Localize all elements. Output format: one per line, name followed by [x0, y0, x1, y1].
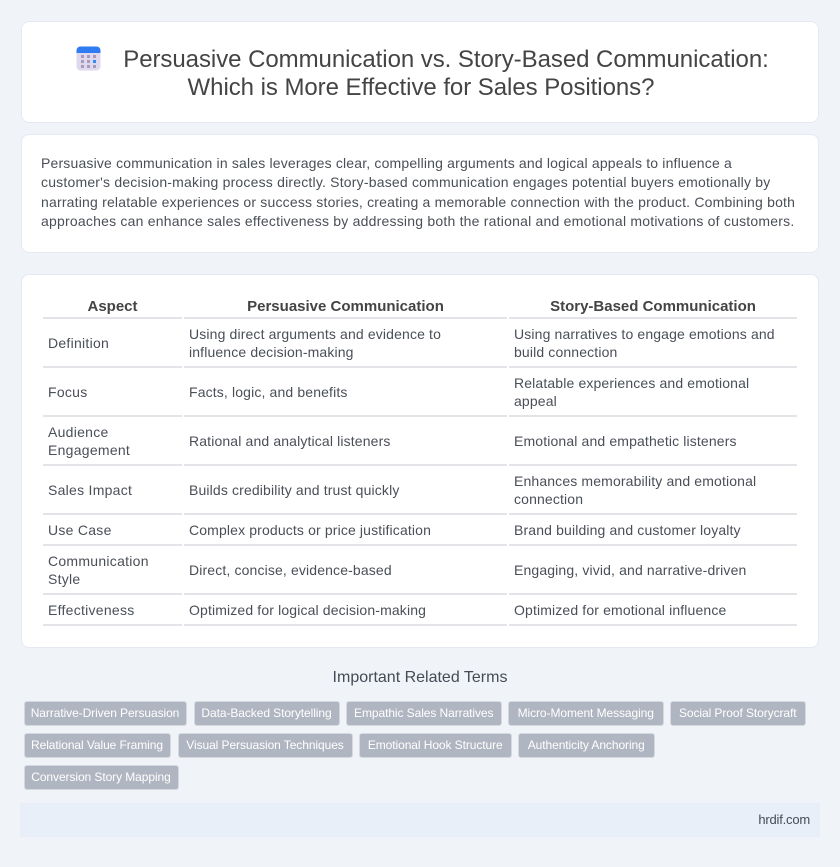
row: definition: build connection	[514, 344, 617, 360]
row: audience engagement: Rational and analytical listeners	[189, 433, 391, 449]
row: focus: Focus	[48, 384, 87, 400]
row: focus: Relatable experiences and emotional	[514, 375, 749, 391]
row: communication style	[48, 553, 746, 587]
chip	[670, 700, 806, 726]
row: communication style: Engaging, vivid, and narrative-driven	[514, 562, 746, 578]
title: Which is More Effective for Sales Positions?	[188, 74, 654, 101]
chip	[24, 700, 186, 726]
chip: Conversion Story Mapping	[31, 770, 171, 784]
chip: Empathic Sales Narratives	[354, 706, 493, 720]
chip	[24, 764, 178, 790]
row: use case: Complex products or price justification	[189, 522, 431, 538]
row: use case	[48, 522, 741, 538]
chip: Narrative-Driven Persuasion	[31, 706, 179, 720]
row: sales impact: Enhances memorability and emotional	[514, 473, 756, 489]
row: use case: Use Case	[48, 522, 112, 538]
row: definition: Definition	[48, 335, 109, 351]
table	[43, 298, 797, 626]
row: audience engagement: Emotional and empathetic listeners	[514, 433, 737, 449]
row: definition	[48, 326, 775, 360]
row: communication style: Direct, concise, evidence-based	[189, 562, 392, 578]
intro text: customer's decision-making process directly. Story-based communication engages potential buyers emotionally by	[41, 174, 770, 190]
footer source: hrdif.com	[758, 812, 810, 827]
chip	[508, 700, 664, 726]
row: definition: influence decision-making	[189, 344, 354, 360]
row: audience engagement: Audience	[48, 424, 109, 440]
title: Persuasive Communication vs. Story-Based Communication:	[123, 46, 769, 73]
row: sales impact: Builds credibility and trust quickly	[189, 482, 399, 498]
row: effectiveness: Optimized for emotional influence	[514, 602, 726, 618]
row: focus	[48, 375, 749, 409]
row: definition: Using narratives to engage emotions and	[514, 326, 775, 342]
chip: Emotional Hook Structure	[368, 738, 503, 752]
chip	[359, 732, 512, 758]
chip: Micro-Moment Messaging	[518, 706, 654, 720]
related terms chips	[24, 701, 806, 790]
table header: persuasive communication: Persuasive Communication	[247, 298, 444, 315]
row: sales impact: connection	[514, 491, 583, 507]
row: communication style: Communication	[48, 553, 149, 569]
row: definition: Using direct arguments and evidence to	[189, 326, 441, 342]
panel: intro paragraph	[20, 134, 818, 252]
chip: Authenticity Anchoring	[528, 738, 645, 752]
chip	[194, 700, 340, 726]
chip: Data-Backed Storytelling	[201, 706, 332, 720]
table header: aspect: Aspect	[87, 298, 138, 315]
row: communication style: Style	[48, 571, 80, 587]
icon: calendar	[76, 46, 100, 70]
footer bar	[20, 803, 820, 837]
chip	[518, 732, 654, 758]
row: effectiveness: Optimized for logical decision-making	[189, 602, 426, 618]
row: audience engagement	[48, 424, 737, 458]
intro text	[41, 155, 795, 229]
heading: important related terms: Important Related Terms	[333, 669, 507, 686]
row: audience engagement: Engagement	[48, 442, 130, 458]
row: sales impact: Sales Impact	[48, 482, 132, 498]
chip	[346, 700, 502, 726]
chip	[178, 732, 352, 758]
table header: story-based communication: Story-Based Communication	[550, 298, 756, 315]
chip: Social Proof Storycraft	[679, 706, 797, 720]
chip: Visual Persuasion Techniques	[186, 738, 344, 752]
panel: header	[20, 20, 818, 122]
intro text: narrating relatable experiences or success stories, creating a memorable connection with the product. Combining both	[41, 194, 795, 210]
row: effectiveness: Effectiveness	[48, 602, 135, 618]
chip	[24, 732, 170, 758]
row: use case: Brand building and customer loyalty	[514, 522, 741, 538]
intro text: approaches can enhance sales effectiveness by addressing both the rational and emotional motivations of customers.	[41, 213, 794, 229]
title	[123, 46, 769, 101]
row: sales impact	[48, 473, 756, 507]
row: focus: appeal	[514, 393, 557, 409]
chip: Relational Value Framing	[31, 738, 163, 752]
row: effectiveness	[48, 602, 726, 618]
row: focus: Facts, logic, and benefits	[189, 384, 348, 400]
intro text: Persuasive communication in sales leverages clear, compelling arguments and logical appeals to influence a	[41, 155, 732, 171]
panel: comparison table	[20, 274, 818, 648]
